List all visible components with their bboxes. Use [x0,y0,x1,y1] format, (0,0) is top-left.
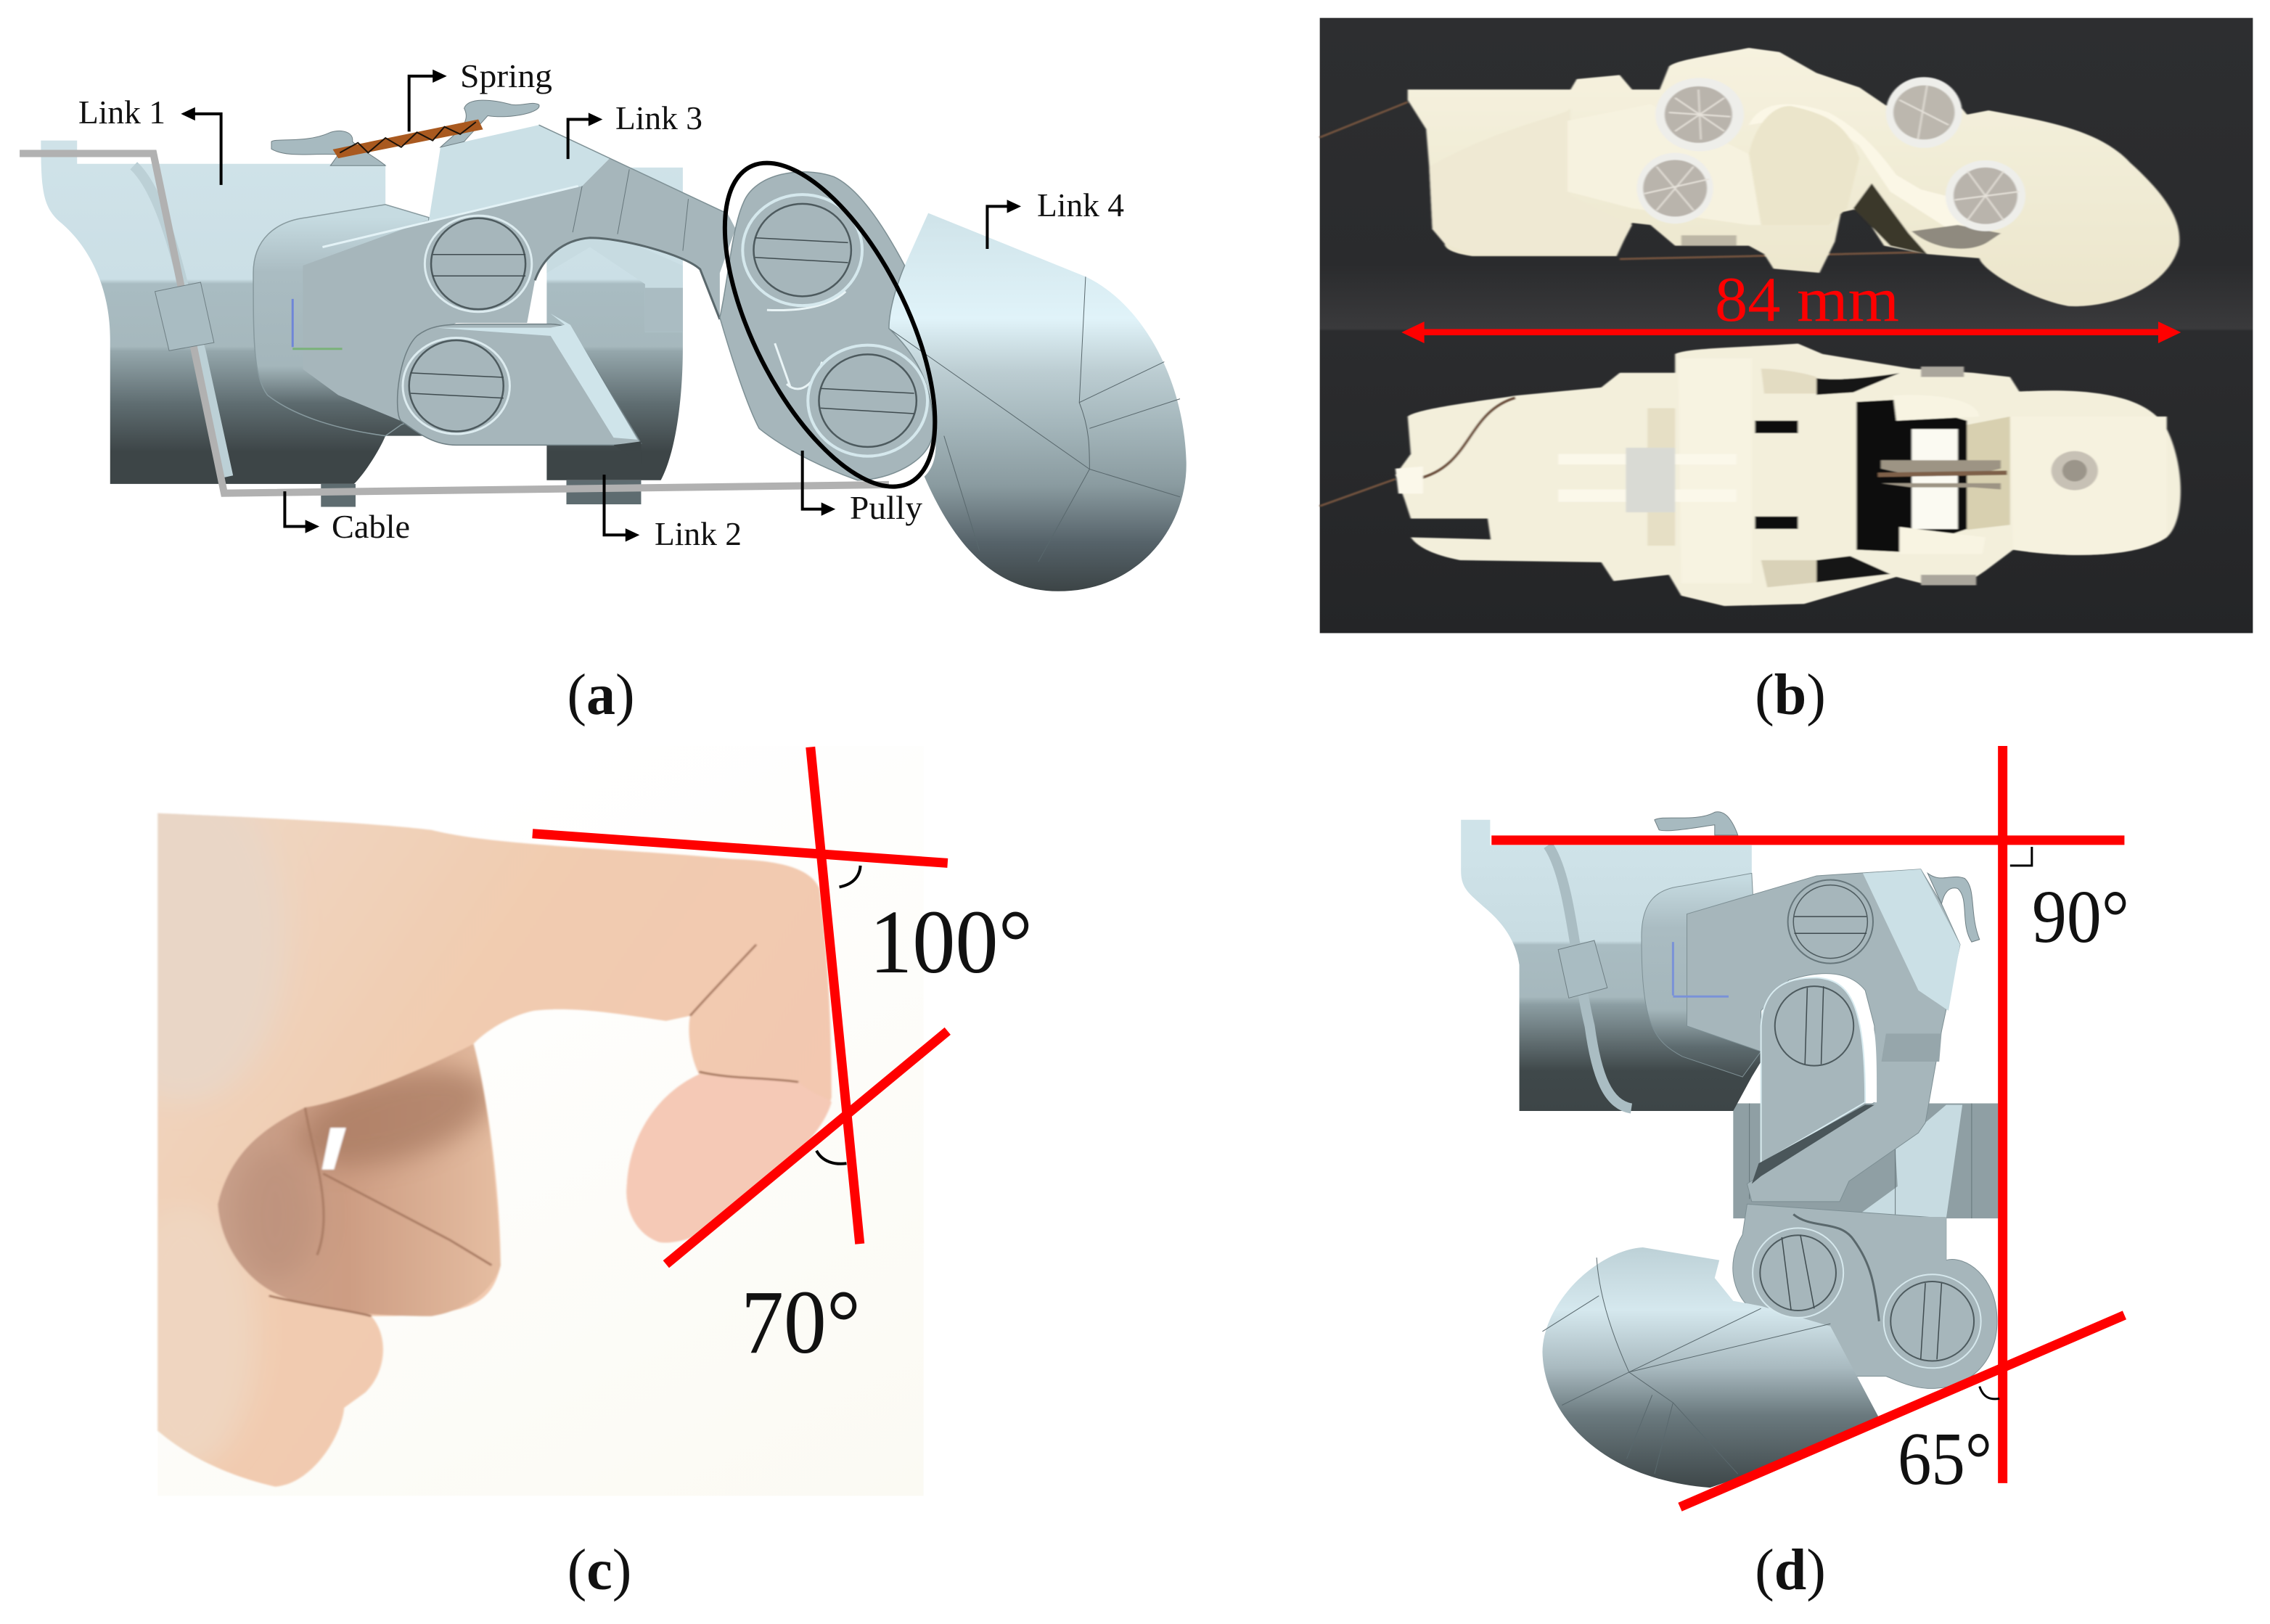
coordinate axes [292,299,294,347]
angle label 100: 100° [869,893,1033,993]
palm shadow [218,1043,501,1316]
Link 1 channel [134,165,228,477]
dimension label: 84 mm [1715,265,1899,335]
creases [269,945,798,1316]
angle label 90: 90° [2032,875,2129,959]
lower finger prototype [1320,344,2181,606]
cable channel [1548,845,1631,1109]
spring hook right [441,100,539,147]
photo background [157,746,924,1496]
Link 2 inner light face [546,221,683,332]
part labels: Link 1 [78,94,165,131]
caption (d): (d) [1755,1538,1826,1602]
hex screw [2052,451,2098,491]
Link 1 body [41,141,425,484]
part labels: Pully [850,489,922,526]
lower link plate [398,324,641,445]
Link 4 fingertip [889,213,1187,591]
plate edge [1752,1105,1874,1184]
part labels: Cable [332,508,410,545]
part labels: Link 3 [615,99,702,136]
cable clamp [155,282,214,350]
spring hook left [271,131,385,165]
Link 2 block [1733,1104,1998,1218]
part labels: Link 2 [655,515,742,552]
spring hook right [1927,873,1980,942]
part labels [78,57,1124,552]
Link 4 fingertip [1542,1247,1879,1488]
screws [1753,880,1981,1368]
coordinate axes [1673,942,1729,996]
panel: (b) photograph of printed prototype [1320,18,2253,633]
nose [1642,873,1761,1077]
Link 3 plate [1687,869,1960,1202]
black ellipse around pully [682,156,978,494]
Link 2 body [546,168,683,480]
pully discs and plate [1733,1204,1997,1388]
angle arc [1980,1387,1999,1399]
screw pully upper [742,194,862,305]
red dimension arrow [1401,321,2181,343]
red angle lines [1491,746,2124,1507]
dark photo background [1320,18,2253,633]
Link 1 nose [253,205,429,436]
spring band [333,120,483,158]
screw pully lower [808,345,927,456]
panel: (a) CAD model with labelled parts [20,57,1187,591]
caption (a): (a) [567,663,635,727]
white gap [322,1128,346,1170]
clamp [1558,940,1607,998]
spring hook top [1655,812,1738,835]
Link 3 plate [303,158,736,421]
part labels: Spring [460,57,552,94]
screw upper [425,216,532,312]
lower link plate [1761,977,1865,1163]
white wedge under plate [1877,1377,1978,1418]
lower tabs [321,480,641,507]
panel: (d) CAD model in flexed pose [1461,746,2129,1507]
cable on base [1417,398,1515,479]
upper finger prototype [1320,48,2179,306]
pin and pulley [1912,429,1958,529]
pully plate [720,172,933,480]
screws [1655,78,1744,151]
panel: (c) human finger flexion photograph [83,746,1033,1496]
Link 3 light face [1863,869,1960,1011]
frame windows [1816,373,1899,395]
right angle mark [2010,847,2032,866]
screw lower [403,337,509,434]
caption (b): (b) [1755,663,1826,727]
fingertip pad [626,1075,832,1242]
Link 3 light top [429,125,610,221]
angle label 70: 70° [741,1273,861,1373]
cable [20,153,889,493]
angle arcs [816,866,861,1164]
caption (c): (c) [568,1538,631,1602]
hand [157,813,833,1488]
angle label 65: 65° [1898,1417,1992,1501]
part labels: Link 4 [1037,186,1124,223]
leader arrows [193,76,1011,535]
Link 1 body [1461,820,1761,1111]
white slot [1865,1008,1877,1102]
red angle lines [533,747,948,1264]
